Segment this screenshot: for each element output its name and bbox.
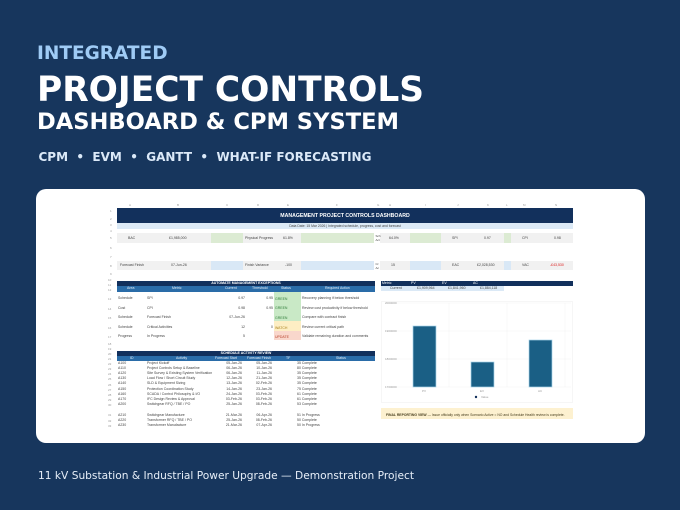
exception rows: In Progress xyxy=(147,334,165,338)
exception rows: Forecast Finish xyxy=(147,315,171,319)
activity rows: A170 xyxy=(118,397,126,401)
column letters: K xyxy=(487,203,489,207)
KPI row 2: Finish Variance xyxy=(245,263,269,267)
data date strip: Data Date: 15 Mar 2026 | Integrated schedule, progress, cost and forecast xyxy=(289,224,401,228)
activity rows: 53 Complete xyxy=(297,402,317,406)
panel: automatic management exceptions xyxy=(117,281,375,340)
table header: Current xyxy=(225,286,237,290)
row numbers: 26 xyxy=(108,383,111,387)
table header: Activity xyxy=(176,356,187,360)
status cells: WATCH xyxy=(275,326,287,330)
row numbers: 11 xyxy=(108,283,111,287)
table header: Metric xyxy=(172,286,182,290)
callout: final reporting view xyxy=(381,408,573,419)
status cells: UPDATE xyxy=(275,335,289,339)
table header: Threshold xyxy=(252,286,268,290)
row numbers: 21 xyxy=(108,357,111,361)
activity rows: A210 xyxy=(118,413,126,417)
activity rows: 61 Complete xyxy=(297,397,317,401)
KPI row 1: BAC xyxy=(128,236,135,240)
dashboard title bar xyxy=(117,208,573,223)
exception rows xyxy=(118,296,368,338)
row numbers: 28 xyxy=(108,393,111,397)
status cells xyxy=(274,292,301,340)
KPI row 1: 0.97 xyxy=(484,236,491,240)
KPI row 2: Cr xyxy=(376,262,379,266)
table header: Area xyxy=(127,286,134,290)
dashboard title bar: MANAGEMENT PROJECT CONTROLS DASHBOARD xyxy=(280,213,410,219)
table header: Status xyxy=(281,286,291,290)
activity rows: 03-Feb-26 xyxy=(256,397,272,401)
activity rows: 14-Jan-26 xyxy=(226,387,242,391)
section heading xyxy=(117,281,375,286)
row numbers: 27 xyxy=(108,388,111,392)
KPI row 1: SPI xyxy=(452,236,458,240)
exception rows: Recovery planning if below threshold xyxy=(302,296,359,300)
callout: final reporting view: FINAL REPORTING VIEW — Issue officially only when Scenario Active = NO and Schedule Health review is complete. xyxy=(386,413,565,417)
activity rows: 61 Complete xyxy=(297,392,317,396)
footer project name: 11 kV Substation & Industrial Power Upgrade — Demonstration Project xyxy=(38,469,414,482)
column letters: H xyxy=(389,203,391,207)
column letters: L xyxy=(506,203,508,207)
activity rows: Project Controls Setup & Baseline xyxy=(147,366,200,370)
table header: ID xyxy=(130,356,134,360)
activity rows: 24-Jan-26 xyxy=(226,392,242,396)
row numbers xyxy=(108,209,112,428)
section heading xyxy=(117,351,375,356)
exception rows: Cost xyxy=(118,306,125,310)
activity rows: Switchgear Manufacture xyxy=(147,413,185,417)
current values: £1,884,118 xyxy=(480,286,497,290)
row numbers: 15 xyxy=(108,316,111,320)
row numbers: 8 xyxy=(110,264,112,268)
activity rows: Project Kickoff xyxy=(147,361,169,365)
row numbers: 10 xyxy=(108,278,111,282)
activity rows: Site Survey & Existing System Verification xyxy=(147,371,212,375)
exception rows: 0.97 xyxy=(238,296,245,300)
activity rows: 21-Mar-26 xyxy=(226,423,242,427)
metric header xyxy=(381,281,573,286)
activity rows: 21-Mar-26 xyxy=(226,413,242,417)
row numbers: 16 xyxy=(108,326,111,330)
activity rows: 10-Jan-26 xyxy=(256,366,272,370)
row numbers: 33 xyxy=(108,424,111,428)
chart: PV EV AC bars: EV xyxy=(480,389,484,393)
activity rows: 07-Apr-26 xyxy=(256,423,272,427)
chart: PV EV AC bars: Value xyxy=(481,395,489,399)
panel: dashboard screenshot card xyxy=(36,189,645,443)
activity rows: 06-Apr-26 xyxy=(256,413,272,417)
current values xyxy=(381,286,504,291)
table header: Status xyxy=(336,356,346,360)
KPI row 2: Ac xyxy=(376,266,379,270)
activity rows: A150 xyxy=(118,387,126,391)
column letters: M xyxy=(523,203,526,207)
column letters: C xyxy=(226,203,228,207)
chart: PV EV AC bars: 1900000 xyxy=(385,329,397,333)
main title: PROJECT CONTROLS xyxy=(37,70,424,110)
row numbers: 3 xyxy=(110,223,112,227)
chart: PV EV AC bars: PV xyxy=(422,389,426,393)
row numbers: 4 xyxy=(110,229,112,233)
status cells: GREEN xyxy=(275,306,287,310)
KPI row 2: VAC xyxy=(522,263,529,267)
activity rows: 03-Feb-26 xyxy=(226,397,242,401)
activity rows: 35 Complete xyxy=(297,381,317,385)
table header: Forecast Finish xyxy=(247,356,271,360)
row numbers: 30 xyxy=(108,403,111,407)
activity rows: Protection Coordination Study xyxy=(147,387,194,391)
table header: Required Action xyxy=(325,286,350,290)
KPI row 2: Forecast Finish xyxy=(120,263,144,267)
exception rows: CPI xyxy=(147,306,153,310)
chart: PV EV AC bars: 2000000 xyxy=(385,301,397,305)
activity rows: 06-Jan-26 xyxy=(226,366,242,370)
exception rows: 5 xyxy=(243,334,245,338)
column letters: E xyxy=(287,203,289,207)
activity rows: A110 xyxy=(118,366,126,370)
row numbers: 31 xyxy=(108,413,111,417)
row numbers: 20 xyxy=(108,352,111,356)
exception rows: 0.95 xyxy=(266,296,273,300)
KPI row 1 xyxy=(117,233,573,243)
column letters: B xyxy=(177,203,179,207)
row numbers: 22 xyxy=(108,362,111,366)
exception rows: 0.98 xyxy=(238,306,245,310)
activity rows: Load Flow / Short Circuit Study xyxy=(147,376,195,380)
activity rows: A140 xyxy=(118,381,126,385)
row numbers: 12 xyxy=(108,288,111,292)
panel: EVM metric table xyxy=(381,281,573,291)
activity rows: 80 Complete xyxy=(297,366,317,370)
row numbers: 25 xyxy=(108,377,111,381)
KPI row 1: 0.98 xyxy=(554,236,561,240)
data date strip xyxy=(117,223,573,229)
table header: TF xyxy=(286,356,290,360)
activity rows: 02-Feb-26 xyxy=(256,381,272,385)
exception rows: Critical Activities xyxy=(147,325,172,329)
exception rows: Validate remaining duration and comments xyxy=(302,334,368,338)
section heading: SCHEDULE ACTIVITY REVIEW xyxy=(221,351,271,355)
activity rows: A230 xyxy=(118,423,126,427)
row numbers: 6 xyxy=(110,246,112,250)
KPI row 2: -£43,530 xyxy=(550,263,564,267)
metric header: EV xyxy=(442,281,447,285)
row numbers: 23 xyxy=(108,367,111,371)
KPI row 2: 07-Jun-26 xyxy=(171,263,187,267)
row numbers: 2 xyxy=(110,217,112,221)
exception rows: Review cost productivity if below threshold xyxy=(302,306,368,310)
activity rows: A220 xyxy=(118,418,126,422)
KPI row 1: 61.8% xyxy=(283,236,293,240)
activity rows: 05-Jan-26 xyxy=(226,361,242,365)
column letters: D xyxy=(257,203,259,207)
activity rows: IFC Design Review & Approval xyxy=(147,397,195,401)
exception rows: 0.95 xyxy=(266,306,273,310)
activity rows: A200 xyxy=(118,402,126,406)
KPI row 1: 64.0% xyxy=(389,236,399,240)
exception rows: Review current critical path xyxy=(302,325,344,329)
activity rows: 21-Jan-26 xyxy=(256,376,272,380)
exception rows: Schedule xyxy=(118,325,133,329)
exception rows: Schedule xyxy=(118,315,133,319)
row numbers: 29 xyxy=(108,398,111,402)
activity rows xyxy=(118,361,320,427)
KPI row 2: -100 xyxy=(285,263,292,267)
activity rows: A100 xyxy=(118,361,126,365)
exception rows: 12 xyxy=(241,325,245,329)
table header xyxy=(117,286,375,292)
row numbers: 13 xyxy=(108,297,111,301)
chart: PV EV AC bars: AC xyxy=(538,389,543,393)
panel: schedule activity review xyxy=(117,351,375,427)
activity rows: 08-Feb-26 xyxy=(256,418,272,422)
status cells: GREEN xyxy=(275,316,287,320)
chart: PV EV AC bars: 1700000 xyxy=(385,385,397,389)
activity rows: 25-Jan-26 xyxy=(226,418,242,422)
row numbers: 24 xyxy=(108,372,111,376)
activity rows: Transformer RFQ / TBE / PO xyxy=(147,418,192,422)
activity rows: 12-Jan-26 xyxy=(226,376,242,380)
row numbers: 9 xyxy=(110,272,112,276)
row numbers: 5 xyxy=(110,236,112,240)
activity rows: SLD & Equipment Sizing xyxy=(147,381,185,385)
status cells: GREEN xyxy=(275,297,287,301)
exception rows: SPI xyxy=(147,296,153,300)
activity rows: SCADA / Control Philosophy & I/O xyxy=(147,392,200,396)
KPI row 1: Physical Progress xyxy=(245,236,273,240)
activity rows: 35 Complete xyxy=(297,371,317,375)
KPI row 2 xyxy=(117,261,573,270)
exception rows: 0 xyxy=(271,325,273,329)
row numbers: 14 xyxy=(108,307,111,311)
row numbers: 18 xyxy=(108,342,111,346)
current values: £1,909,964 xyxy=(417,286,435,290)
row numbers: 19 xyxy=(108,347,111,351)
activity rows: Transformer Manufacture xyxy=(147,423,186,427)
activity rows: 51 In Progress xyxy=(297,413,320,417)
table header: Forecast Start xyxy=(215,356,237,360)
section heading: AUTOMATE MANAGEMENT EXCEPTIONS xyxy=(211,281,281,285)
column letters: F xyxy=(336,203,338,207)
KPI row 1: Sch xyxy=(376,234,381,238)
metric header: Metric xyxy=(382,281,392,285)
KPI row 1: CPI xyxy=(522,236,528,240)
exception rows: Schedule xyxy=(118,296,133,300)
activity rows: 08-Feb-26 xyxy=(256,402,272,406)
column letters: N xyxy=(555,203,557,207)
row numbers: 7 xyxy=(110,255,112,259)
table header xyxy=(117,356,375,361)
activity rows: 75 Complete xyxy=(297,387,317,391)
activity rows: 11-Jan-26 xyxy=(256,371,272,375)
activity rows: 50 In Progress xyxy=(297,423,320,427)
metric header: AC xyxy=(473,281,478,285)
chart: PV EV AC bars: 1800000 xyxy=(385,357,397,361)
column letters: A xyxy=(129,203,131,207)
activity rows: 13-Jan-26 xyxy=(226,381,242,385)
exception rows: Compare with contract finish xyxy=(302,315,346,319)
activity rows: Switchgear RFQ / TBE / PO xyxy=(147,402,190,406)
activity rows: 05-Jan-26 xyxy=(256,361,272,365)
activity rows: 03-Feb-26 xyxy=(256,392,272,396)
row numbers: 32 xyxy=(108,419,111,423)
row numbers: 1 xyxy=(110,209,112,213)
current values: £1,841,960 xyxy=(448,286,466,290)
KPI row 2: 15 xyxy=(391,263,395,267)
KPI row 1: £1,985,000 xyxy=(169,236,187,240)
activity rows: 35 Complete xyxy=(297,376,317,380)
KPI row 2: EAC xyxy=(452,263,459,267)
feature list: CPM • EVM • GANTT • WHAT-IF FORECASTING xyxy=(38,150,371,164)
activity rows: 35 Complete xyxy=(297,361,317,365)
activity rows: A130 xyxy=(118,376,126,380)
metric header: PV xyxy=(411,281,416,285)
activity rows: A120 xyxy=(118,371,126,375)
column letters: G xyxy=(377,203,379,207)
secondary title: DASHBOARD & CPM SYSTEM xyxy=(37,109,399,135)
activity rows: 06-Jan-26 xyxy=(226,371,242,375)
activity rows: 23-Jan-26 xyxy=(256,387,272,391)
KPI row 2: £2,028,530 xyxy=(477,263,495,267)
activity rows: 50 Complete xyxy=(297,418,317,422)
chart: PV EV AC bars xyxy=(381,301,573,403)
activity rows: A160 xyxy=(118,392,126,396)
exception rows: 07-Jun-26 xyxy=(229,315,245,319)
current values: Current xyxy=(390,286,402,290)
row numbers: 17 xyxy=(108,335,111,339)
KPI row 1: Act xyxy=(376,238,380,242)
activity rows: 25-Jan-26 xyxy=(226,402,242,406)
exception rows: Progress xyxy=(118,334,132,338)
column letters: I xyxy=(425,203,426,207)
column letters xyxy=(129,203,557,207)
column letters: J xyxy=(457,203,458,207)
eyebrow heading: INTEGRATED xyxy=(37,43,168,64)
